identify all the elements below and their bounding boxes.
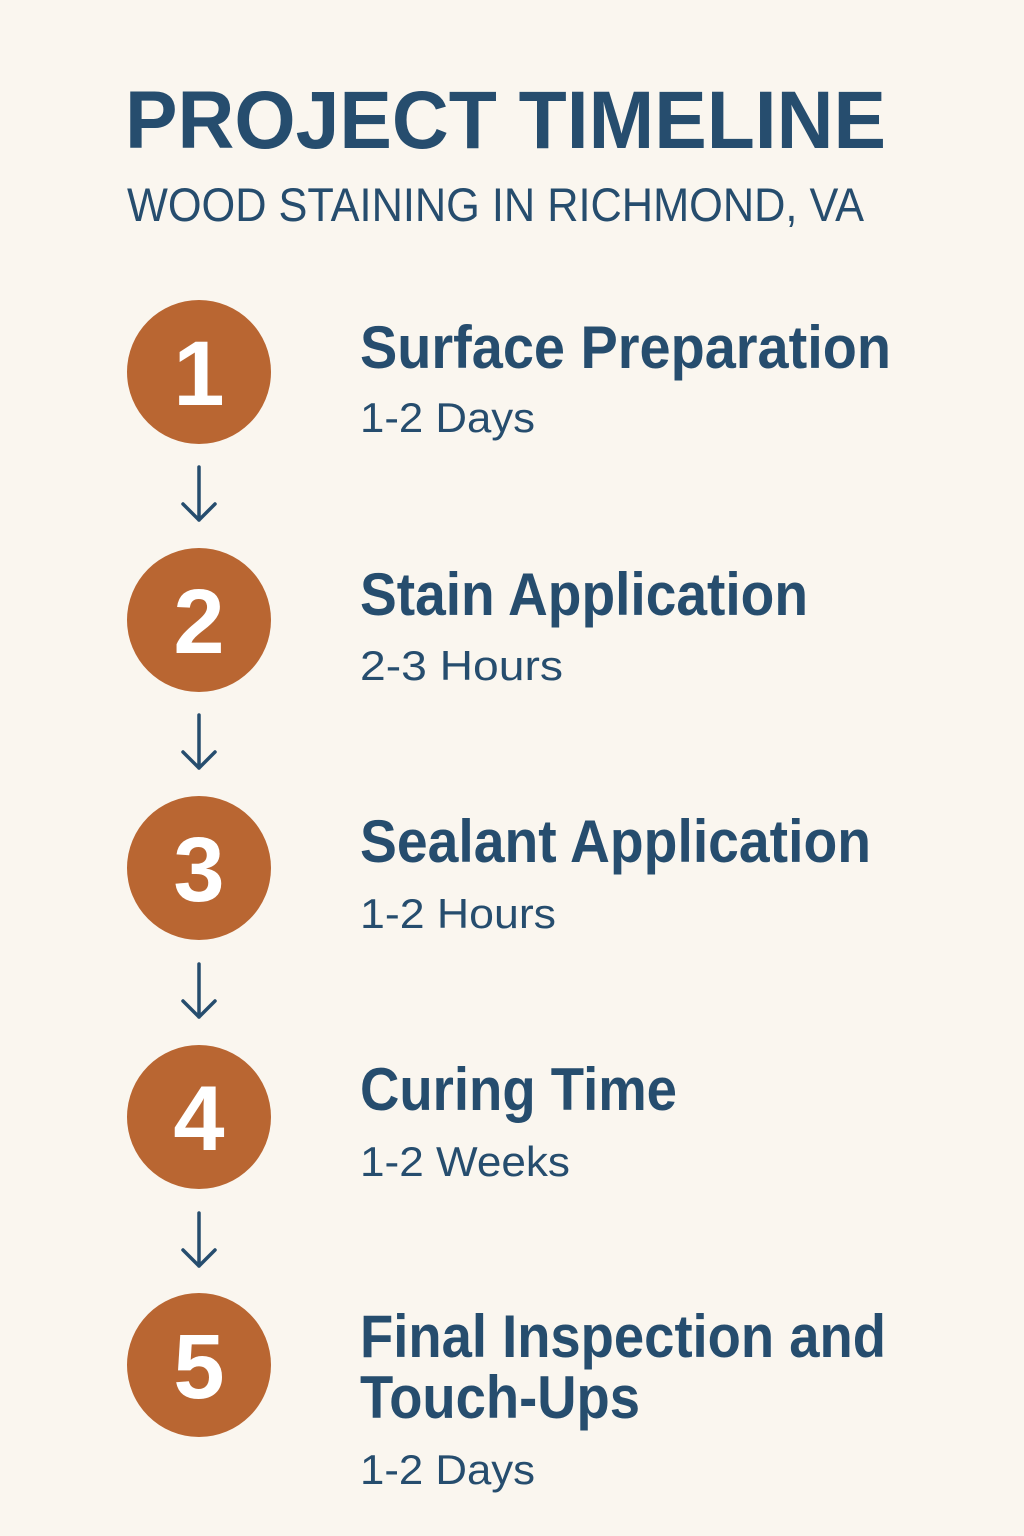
circle 2 [127, 548, 271, 692]
arrow 4 [183, 1213, 215, 1266]
arrow 2 [183, 715, 215, 768]
arrow 3 [183, 964, 215, 1017]
title: PROJECT TIMELINE [125, 75, 886, 166]
circle 5: 5 [173, 1316, 225, 1418]
step 4 duration: 1-2 Weeks [360, 1138, 570, 1185]
step 4 [127, 1045, 677, 1189]
step 4 title: Curing Time [360, 1056, 677, 1123]
step 5 title [360, 1303, 886, 1431]
step 1 duration: 1-2 Days [360, 394, 535, 441]
step 5 title: Touch-Ups [360, 1364, 640, 1431]
step 2 title: Stain Application [360, 561, 808, 628]
arrow 1 [183, 467, 215, 520]
step 2 duration: 2-3 Hours [360, 642, 563, 689]
step 3 title: Sealant Application [360, 808, 871, 875]
circle 2: 2 [173, 571, 225, 673]
step 5 duration: 1-2 Days [360, 1446, 535, 1493]
step 1 [127, 300, 891, 444]
step 5 [127, 1293, 886, 1493]
subtitle: WOOD STAINING IN RICHMOND, VA [127, 178, 865, 231]
circle 5 [127, 1293, 271, 1437]
step 5 title: Final Inspection and [360, 1303, 886, 1370]
step 3 [127, 796, 871, 940]
circle 4 [127, 1045, 271, 1189]
step 2 [127, 548, 808, 692]
circle 3 [127, 796, 271, 940]
circle 4: 4 [173, 1068, 225, 1170]
circle 1 [127, 300, 271, 444]
circle 3: 3 [173, 819, 225, 921]
step 1 title: Surface Preparation [360, 314, 891, 381]
step 3 duration: 1-2 Hours [360, 890, 556, 937]
circle 1: 1 [173, 323, 225, 425]
